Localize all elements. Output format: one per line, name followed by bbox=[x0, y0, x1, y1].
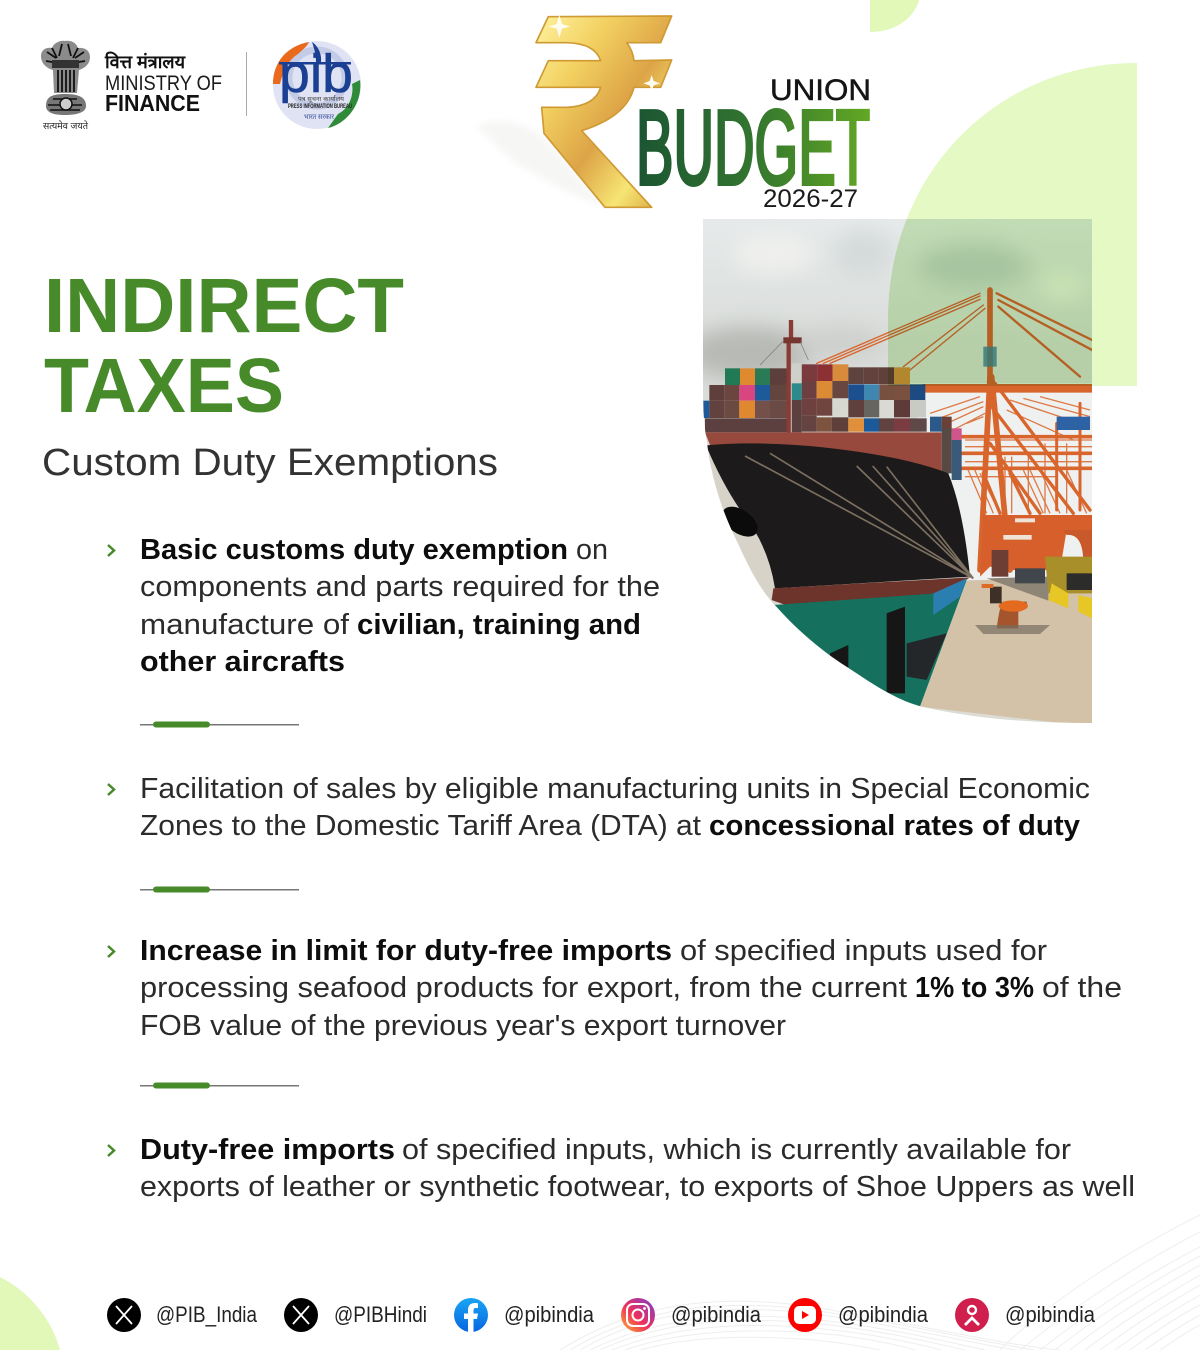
item 1 text: on bbox=[576, 534, 608, 566]
X: PIBHindi: @PIBHindi bbox=[334, 1302, 427, 1327]
ministry name: FINANCE bbox=[105, 90, 200, 116]
logo divider bbox=[246, 52, 247, 116]
budget logo: UNION bbox=[770, 74, 871, 107]
item 3 text: Increase in limit for duty-free imports bbox=[140, 935, 672, 967]
bullet bbox=[108, 1145, 114, 1156]
rupee symbol bbox=[477, 15, 672, 207]
ministry name: MINISTRY OF bbox=[105, 72, 222, 95]
item 3: seafood inputs bbox=[108, 935, 1122, 1042]
water bbox=[773, 580, 967, 707]
photo: container ship at port bbox=[703, 219, 1092, 723]
decorative wave pattern bbox=[560, 1215, 1200, 1350]
mooring ropes bbox=[745, 453, 973, 578]
bullet bbox=[108, 784, 114, 795]
YouTube: @pibindia bbox=[838, 1302, 929, 1327]
item 1 text: civilian, training and bbox=[357, 609, 641, 641]
dock bbox=[920, 577, 1092, 727]
bullet bbox=[108, 946, 114, 957]
item 3 text: of specified inputs used for bbox=[680, 935, 1047, 967]
item 2: SEZ sales bbox=[108, 773, 1090, 842]
crane structure bbox=[817, 290, 1092, 570]
item 1 text bbox=[140, 534, 660, 678]
divider 2 bbox=[140, 886, 299, 892]
sky bbox=[703, 219, 1093, 726]
red waterline bbox=[772, 577, 970, 607]
item 4 text: of specified inputs, which is currently available for bbox=[402, 1134, 1071, 1166]
item 1: aircraft components bbox=[108, 534, 660, 678]
logo: Ministry of Finance bbox=[41, 41, 222, 132]
item 3 text: 1% to 3% bbox=[915, 972, 1034, 1004]
X: PIBHindi bbox=[284, 1298, 427, 1332]
item 1 text: manufacture of bbox=[140, 609, 350, 641]
crane base bbox=[980, 515, 1092, 577]
yellow vehicles bbox=[1045, 557, 1092, 593]
social media footer bbox=[107, 1298, 1096, 1332]
Koo: @pibindia bbox=[1005, 1302, 1096, 1327]
divider 3 bbox=[140, 1082, 299, 1088]
item 3 text: of the bbox=[1042, 972, 1122, 1004]
item 2 text: Facilitation of sales by eligible manufacturing units in Special Economic bbox=[140, 773, 1090, 805]
motto: सत्यमेव जयते bbox=[43, 120, 89, 132]
Instagram bbox=[621, 1298, 762, 1332]
item 4 text bbox=[140, 1134, 1135, 1203]
budget logo: BUDGET bbox=[636, 89, 870, 207]
containers bbox=[703, 363, 962, 480]
title bbox=[44, 263, 404, 429]
green tint over photo bbox=[888, 219, 1092, 386]
logo: PIB: PRESS INFORMATION BUREAU bbox=[288, 104, 352, 110]
icon: national emblem bbox=[41, 41, 90, 132]
item 1 text: other aircrafts bbox=[140, 646, 345, 678]
fenders bbox=[933, 578, 967, 615]
YouTube bbox=[788, 1298, 929, 1332]
item 3 text bbox=[140, 935, 1122, 1042]
decorative green corner: bottom left bbox=[0, 1277, 60, 1350]
bullet bbox=[108, 545, 114, 556]
ship mast bbox=[789, 320, 791, 442]
logo: PIB: पत्र सूचना कार्यालय bbox=[298, 95, 344, 103]
logo: PIB: pib bbox=[279, 44, 353, 104]
logo: PIB: भारत सरकार bbox=[304, 114, 334, 121]
item 2 text: Zones to the Domestic Tariff Area (DTA) at bbox=[140, 810, 701, 842]
X: PIB_India bbox=[107, 1298, 258, 1332]
Facebook: @pibindia bbox=[504, 1302, 595, 1327]
decorative green corner: top bbox=[870, 0, 919, 32]
bollards bbox=[997, 602, 1027, 628]
item 1 text: components and parts required for the bbox=[140, 571, 660, 603]
budget logo: 2026-27 bbox=[763, 185, 858, 213]
item 3 text: FOB value of the previous year's export turnover bbox=[140, 1010, 786, 1042]
item 1 text: Basic customs duty exemption bbox=[140, 534, 568, 566]
item 3 text: processing seafood products for export, from the current bbox=[140, 972, 907, 1004]
X: PIB_India: @PIB_India bbox=[156, 1302, 258, 1327]
divider 1 bbox=[140, 722, 299, 728]
Instagram: @pibindia bbox=[671, 1302, 762, 1327]
item 4 text: Duty-free imports bbox=[140, 1134, 395, 1166]
item 2 text bbox=[140, 773, 1090, 842]
Koo bbox=[955, 1298, 1096, 1332]
left backdrop bbox=[708, 453, 776, 605]
title: TAXES bbox=[44, 343, 284, 429]
subtitle: Custom Duty Exemptions bbox=[42, 442, 498, 484]
Facebook bbox=[454, 1298, 595, 1332]
budget logo bbox=[636, 74, 871, 213]
item 4: footwear inputs bbox=[108, 1134, 1135, 1203]
item 4 text: exports of leather or synthetic footwear, to exports of Shoe Uppers as well bbox=[140, 1171, 1135, 1203]
decorative green shape: right bbox=[888, 63, 1137, 386]
ministry name: वित्त मंत्रालय bbox=[104, 51, 187, 72]
red deck bbox=[705, 432, 942, 471]
title: INDIRECT bbox=[44, 263, 404, 349]
background cranes bbox=[930, 397, 1092, 513]
item 2 text: concessional rates of duty bbox=[709, 810, 1080, 842]
logo: PIB bbox=[273, 41, 361, 129]
ministry name bbox=[104, 51, 222, 116]
clouds bbox=[687, 230, 1087, 380]
crane detail bbox=[1057, 417, 1090, 430]
black hull bbox=[706, 443, 970, 588]
